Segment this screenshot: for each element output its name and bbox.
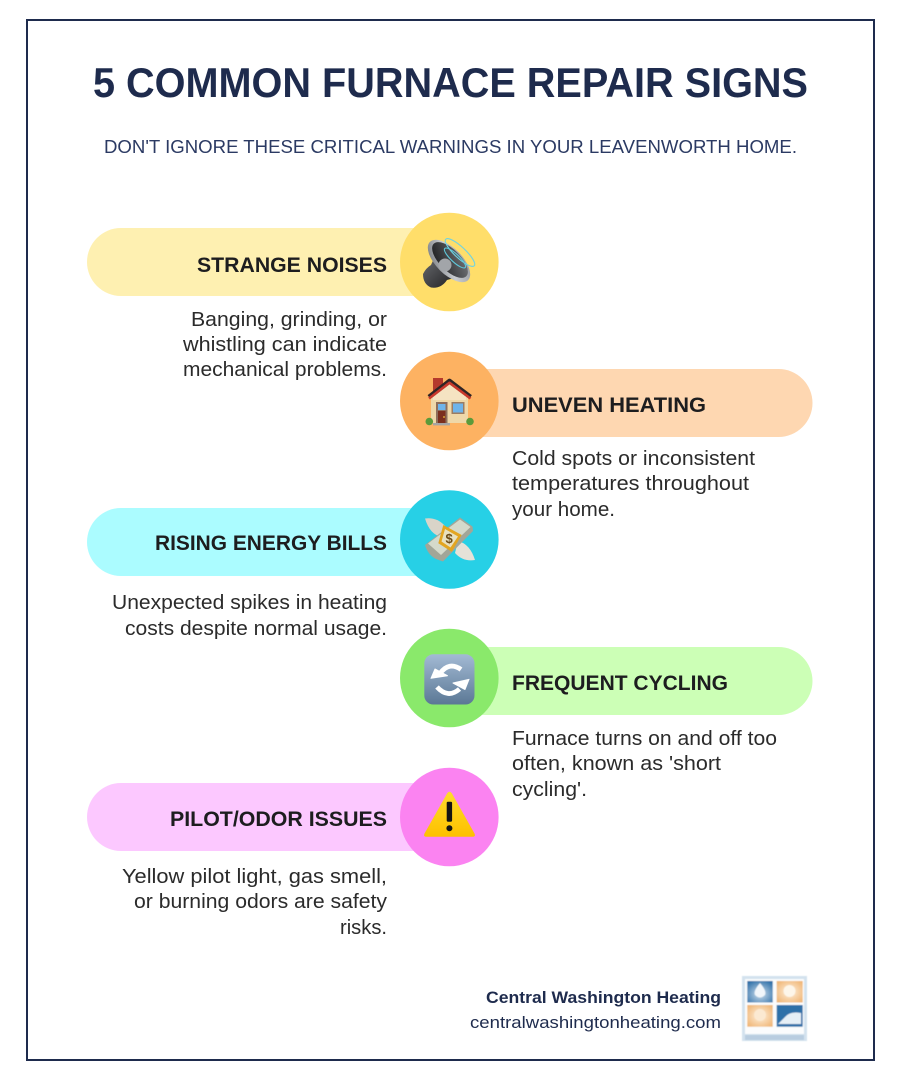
text: frequent cycling description: Furnace turns on and off too [512, 728, 777, 750]
icon: speaker [421, 233, 478, 289]
heading: strange noises: STRANGE NOISES [197, 253, 387, 277]
icon circle: strange noises [400, 213, 499, 311]
text: pilot/odor issues description: or burning odors are safety [134, 891, 387, 913]
panel: strange noises [87, 213, 499, 381]
icon circle: rising energy bills [400, 490, 499, 589]
text: rising energy bills description: costs despite normal usage. [125, 618, 387, 640]
heading: pilot/odor issues: PILOT/ODOR ISSUES [170, 807, 387, 831]
icon circle: frequent cycling [400, 629, 499, 727]
text: strange noises description: mechanical problems. [183, 359, 387, 381]
text: strange noises description: whistling can indicate [182, 334, 387, 356]
heading: rising energy bills: RISING ENERGY BILLS [155, 531, 387, 555]
heading pill: frequent cycling [450, 647, 812, 715]
text: rising energy bills description: Unexpected spikes in heating [112, 592, 387, 614]
panel: frequent cycling [400, 629, 812, 801]
heading: uneven heating: UNEVEN HEATING [512, 393, 706, 417]
subtitle: DON'T IGNORE THESE CRITICAL WARNINGS IN YOUR LEAVENWORTH HOME. [104, 136, 797, 157]
text: frequent cycling description: often, known as 'short [512, 753, 721, 775]
footer website: centralwashingtonheating.com [470, 1014, 721, 1032]
text: strange noises description: Banging, grinding, or [191, 309, 387, 331]
text: rising energy bills description [112, 592, 387, 640]
text: pilot/odor issues description: risks. [340, 917, 387, 939]
icon circle: uneven heating [400, 352, 499, 450]
icon: money with wings: $ [446, 531, 454, 546]
text: pilot/odor issues description [122, 866, 387, 939]
text: uneven heating description: temperatures throughout [512, 473, 749, 495]
panel: uneven heating [400, 352, 812, 521]
icon: warning [424, 792, 475, 837]
text: strange noises description [182, 309, 387, 381]
text: frequent cycling description: cycling'. [512, 779, 587, 801]
heading: frequent cycling: FREQUENT CYCLING [512, 671, 728, 695]
heading pill: strange noises [87, 228, 449, 296]
icon: money with wings [425, 518, 475, 562]
text: uneven heating description [512, 448, 755, 521]
heading pill: pilot/odor issues [87, 783, 449, 851]
text: frequent cycling description [512, 728, 777, 801]
text: pilot/odor issues description: Yellow pilot light, gas smell, [122, 866, 387, 888]
icon: house [426, 378, 474, 425]
panel: pilot/odor issues [87, 768, 499, 939]
text: uneven heating description: Cold spots or inconsistent [512, 448, 755, 470]
title: 5 COMMON FURNACE REPAIR SIGNS [93, 59, 808, 106]
panel: rising energy bills [87, 490, 499, 640]
text: uneven heating description: your home. [512, 499, 615, 521]
heading pill: uneven heating [450, 369, 812, 437]
icon: cycle arrows [424, 654, 474, 704]
heading pill: rising energy bills [87, 508, 449, 576]
logo [742, 976, 807, 1041]
icon circle: pilot/odor issues [400, 768, 499, 866]
footer company name: Central Washington Heating [486, 989, 721, 1007]
